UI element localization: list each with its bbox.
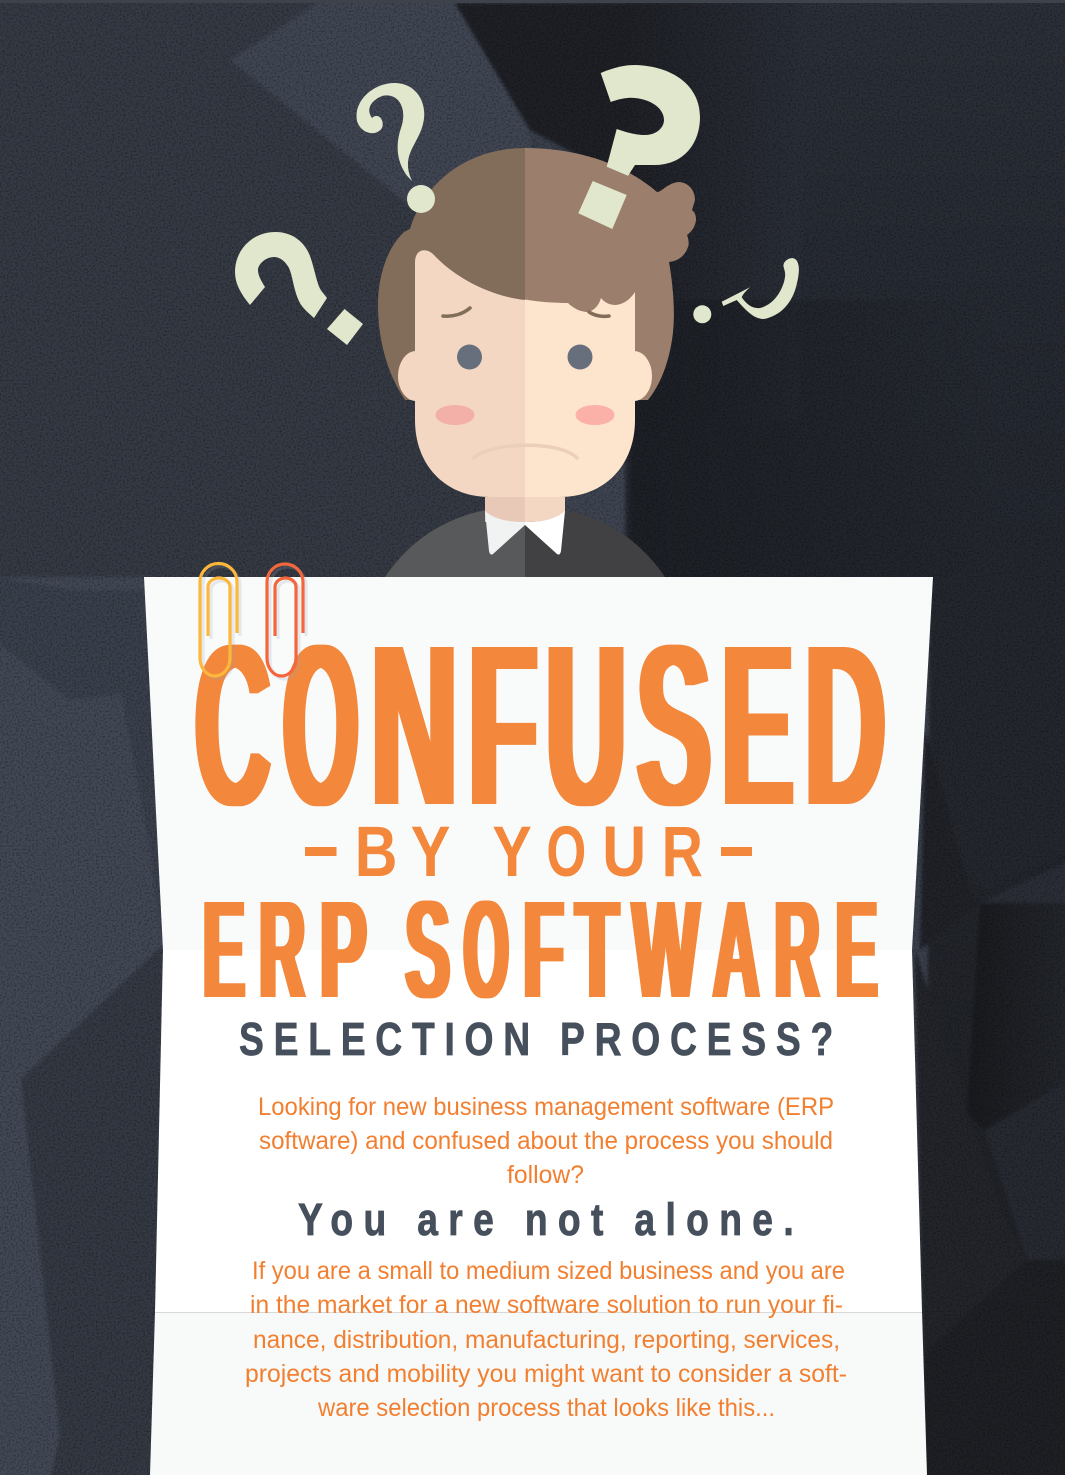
infographic canvas: E: [836, 870, 877, 1028]
title: confused: E: [722, 594, 794, 856]
shoulders: [385, 510, 665, 577]
face: [415, 250, 635, 497]
title: confused: C: [195, 594, 271, 856]
frown: [474, 445, 577, 458]
title: selection process: SELECTION PROCESS?: [239, 1013, 843, 1065]
subtitle: by your: U: [602, 813, 646, 892]
yellow paperclip: [200, 564, 240, 679]
body paragraph: projects and mobility you might want to consider a soft-: [245, 1360, 847, 1388]
infographic canvas: D: [805, 594, 886, 856]
body paragraph: [245, 1257, 847, 1422]
subtitle: by your: R: [662, 813, 703, 892]
subtitle: by your: B: [355, 813, 398, 892]
body paragraph: If you are a small to medium sized business and you are: [252, 1257, 845, 1285]
collar: [485, 511, 565, 555]
title: erp software: F: [523, 870, 564, 1028]
neck: [485, 497, 565, 522]
subtitle: by your: Y: [492, 813, 532, 892]
title: erp software: T: [576, 870, 618, 1028]
body paragraph: ware selection process that looks like this...: [317, 1394, 775, 1422]
title: confused: F: [468, 594, 538, 856]
title: erp software: A: [713, 870, 759, 1028]
intro paragraph: follow?: [507, 1161, 584, 1189]
cheeks: [436, 405, 614, 425]
paper sheet: [144, 577, 933, 1475]
title: erp software: S: [405, 870, 450, 1028]
intro paragraph: Looking for new business management software (ERP: [258, 1093, 834, 1121]
intro paragraph: software) and confused about the process you should: [259, 1127, 833, 1155]
subtitle: by your: O: [546, 813, 586, 892]
title: confused: S: [637, 594, 711, 856]
title: confused: [195, 594, 886, 856]
eyebrows: [443, 308, 609, 316]
callout: you are not alone: You are not alone.: [298, 1194, 804, 1245]
confused character: [378, 148, 696, 577]
curly question mark: [357, 83, 435, 213]
ears: [398, 351, 652, 401]
eyes: [457, 344, 592, 370]
red paperclip: [267, 564, 306, 679]
subtitle: by your: [305, 813, 752, 892]
title: erp software: [203, 870, 877, 1028]
title: erp software: W: [632, 870, 699, 1028]
sideways question mark: [693, 258, 799, 323]
body paragraph: in the market for a new software solution to run your fi-: [250, 1291, 843, 1319]
body paragraph: nance, distribution, manufacturing, reporting, services,: [253, 1326, 840, 1354]
title: erp software: O: [464, 870, 508, 1028]
large question mark: [578, 65, 700, 229]
title: erp software: R: [259, 870, 305, 1028]
title: confused: U: [546, 594, 626, 856]
intro paragraph: [258, 1093, 834, 1189]
tilted question mark: [235, 232, 363, 345]
subtitle: by your: Y: [411, 813, 450, 892]
title: confused: O: [283, 594, 359, 856]
title: confused: N: [371, 594, 458, 856]
paperclips: [200, 564, 306, 679]
title: erp software: R: [774, 870, 820, 1028]
title: erp software: E: [203, 870, 245, 1028]
title: erp software: P: [320, 870, 366, 1028]
hair: [378, 148, 696, 400]
question marks: [235, 65, 799, 345]
